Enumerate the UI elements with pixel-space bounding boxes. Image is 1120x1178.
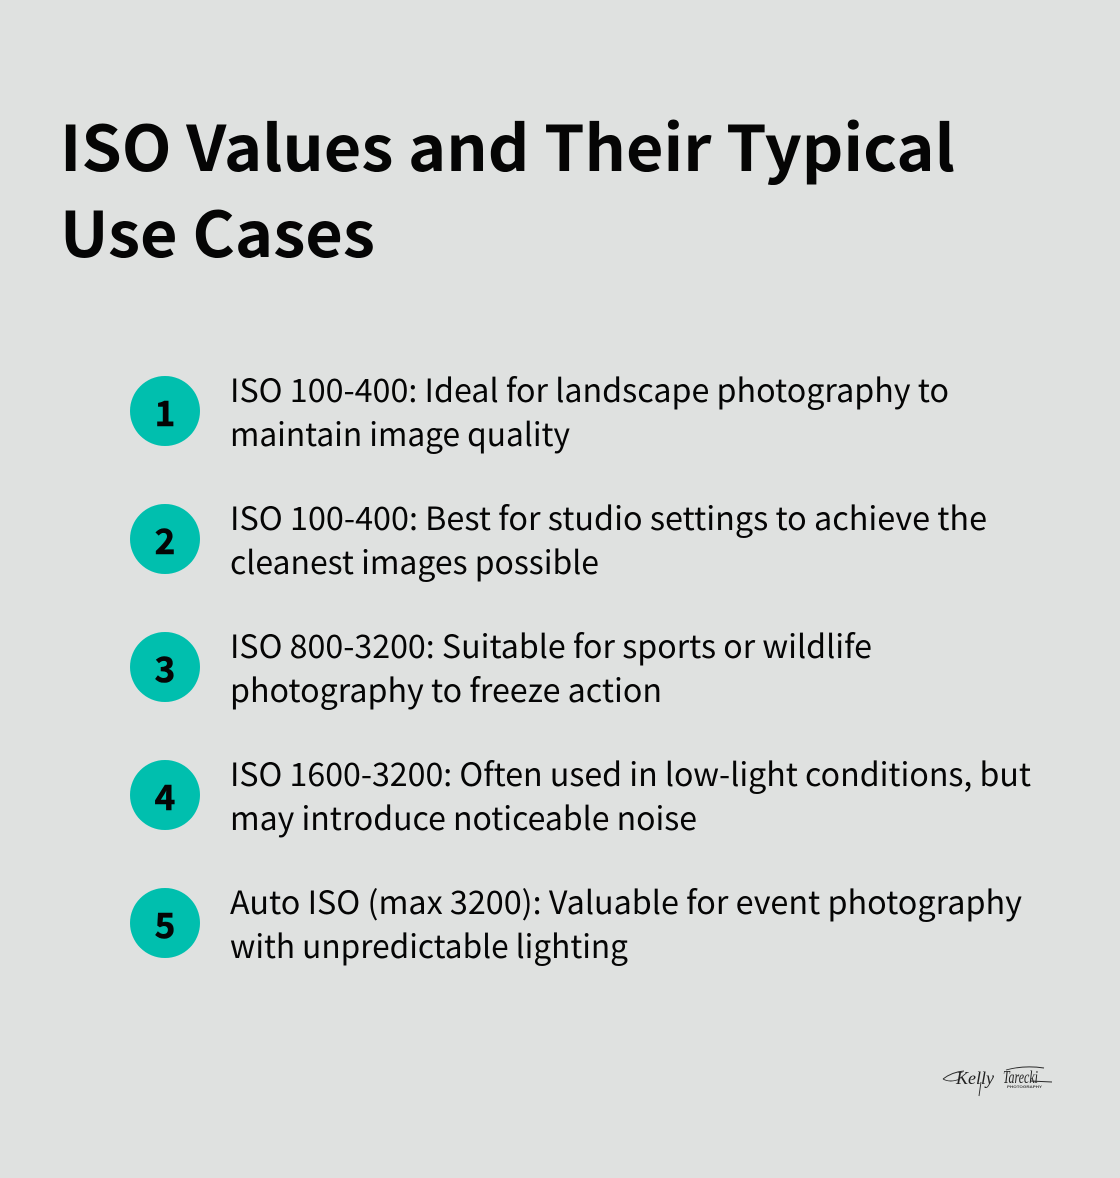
item 1 text <box>230 366 949 456</box>
item 3 text <box>230 622 872 712</box>
number badge 4: 4 <box>155 770 175 821</box>
item 2 text: ISO 100-400: Best for studio settings to achieve the <box>230 494 987 540</box>
number badge 4 <box>130 760 200 830</box>
item 4 text: may introduce noticeable noise <box>230 794 697 840</box>
title: Use Cases <box>60 185 375 276</box>
number badge 2 <box>130 504 200 574</box>
item 2 text: cleanest images possible <box>230 538 599 584</box>
item 4 text <box>230 750 1031 840</box>
item 3 text: photography to freeze action <box>230 666 662 712</box>
number badge 5 <box>130 888 200 958</box>
item 5 <box>130 878 1022 968</box>
item 1 text: maintain image quality <box>230 410 570 456</box>
item 4 text: ISO 1600-3200: Often used in low-light conditions, but <box>230 750 1031 796</box>
number badge 3: 3 <box>155 642 175 693</box>
number badge 1 <box>130 376 200 446</box>
item 2 <box>130 494 987 584</box>
item 2 text <box>230 494 987 584</box>
item 5 text <box>230 878 1022 968</box>
signature logo: Tarecki <box>1003 1067 1038 1087</box>
item 4 <box>130 750 1031 840</box>
number badge 5: 5 <box>155 898 175 949</box>
item 1 text: ISO 100-400: Ideal for landscape photography to <box>230 366 949 412</box>
signature logo: PHOTOGRAPHY <box>1007 1085 1043 1089</box>
item 5 text: Auto ISO (max 3200): Valuable for event photography <box>230 878 1022 924</box>
number badge 2: 2 <box>155 514 175 565</box>
item 3 <box>130 622 872 712</box>
item 3 text: ISO 800-3200: Suitable for sports or wildlife <box>230 622 872 668</box>
item 1 <box>130 366 949 456</box>
item 5 text: with unpredictable lighting <box>230 922 628 968</box>
title: ISO Values and Their Typical <box>60 99 955 190</box>
title <box>60 99 955 276</box>
list of ISO use cases <box>130 366 1031 968</box>
signature logo: Kelly <box>955 1068 994 1088</box>
number badge 3 <box>130 632 200 702</box>
number badge 1: 1 <box>155 386 175 437</box>
signature logo <box>943 1067 1052 1096</box>
